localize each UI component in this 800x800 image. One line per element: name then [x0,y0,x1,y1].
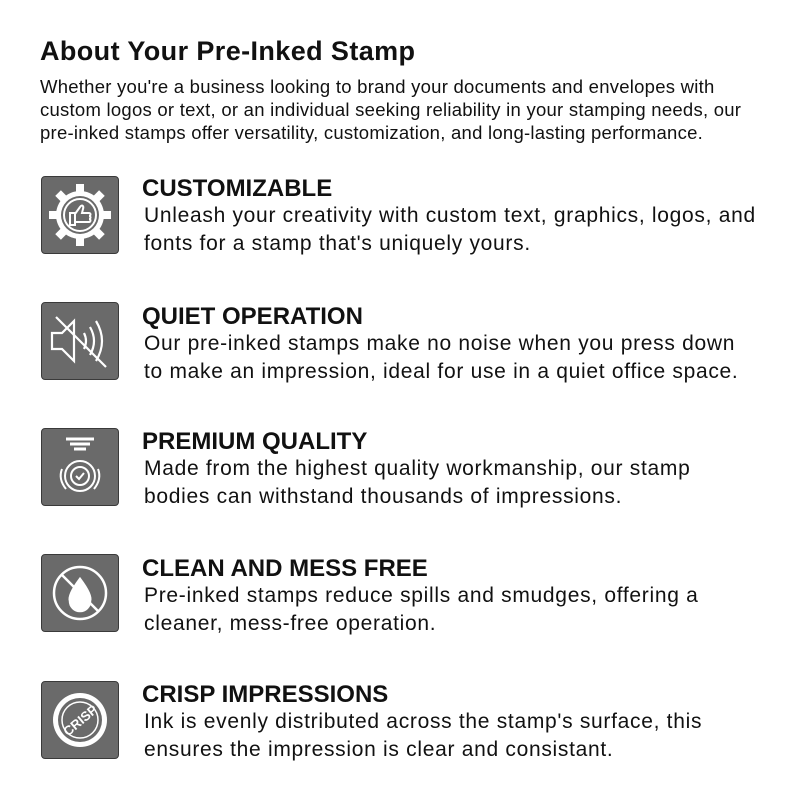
text: quiet operation [144,332,738,383]
title: About Your Pre-Inked Stamp [40,36,415,66]
intro text: Whether you're a business looking to brand your documents and envelopes with [40,76,715,97]
icon: no ink drop [41,554,119,632]
intro text: custom logos or text, or an individual seeking reliability in your stamping needs, our [40,99,741,120]
icon: muted speaker [41,302,119,380]
text: premium quality [144,457,690,508]
text: customizable [144,204,756,255]
text: crisp impressions: Ink is evenly distributed across the stamp's surface, this [144,710,702,733]
heading: clean and mess free: CLEAN AND MESS FREE [142,555,428,582]
text: quiet operation: Our pre-inked stamps make no noise when you press down [144,332,735,355]
icon: gear thumbs up [41,176,119,254]
icon: medal [41,428,119,506]
text: customizable: fonts for a stamp that's uniquely yours. [144,232,531,255]
heading: customizable: CUSTOMIZABLE [142,175,332,202]
intro text: pre-inked stamps offer versatility, customization, and long-lasting performance. [40,122,703,143]
intro text [40,76,741,143]
icon: crisp seal [41,681,119,759]
heading: quiet operation: QUIET OPERATION [142,303,363,330]
icon: crisp seal: CRISP [60,702,101,739]
heading: premium quality: PREMIUM QUALITY [142,428,367,455]
text: customizable: Unleash your creativity with custom text, graphics, logos, and [144,204,756,227]
text: premium quality: Made from the highest quality workmanship, our stamp [144,457,690,480]
heading: crisp impressions: CRISP IMPRESSIONS [142,681,388,708]
text: crisp impressions: ensures the impression is clear and consistant. [144,738,613,761]
text: clean and mess free [144,584,699,635]
text: clean and mess free: cleaner, mess-free operation. [144,612,436,635]
text: premium quality: bodies can withstand thousands of impressions. [144,485,622,508]
text: clean and mess free: Pre-inked stamps reduce spills and smudges, offering a [144,584,699,607]
text: crisp impressions [144,710,702,761]
text: quiet operation: to make an impression, ideal for use in a quiet office space. [144,360,738,383]
